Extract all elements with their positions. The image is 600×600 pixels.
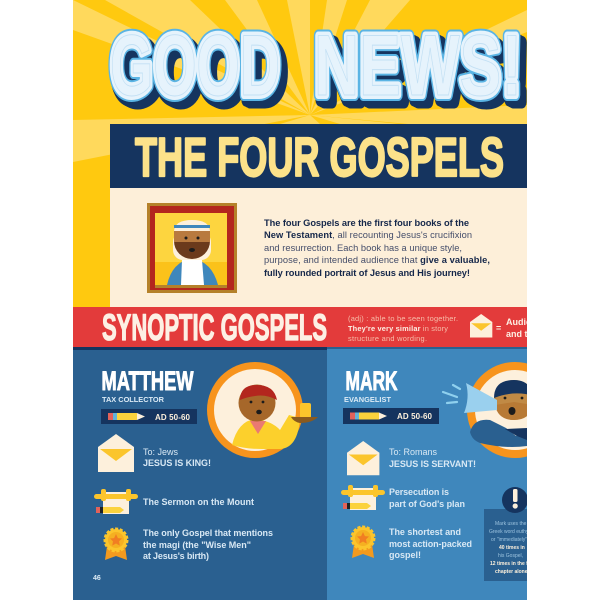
callout: Mark's word: chapter alone!	[495, 569, 530, 575]
title: GOOD NEWS!: NEWS!	[320, 25, 528, 121]
definition: They're very similar in story	[348, 324, 448, 333]
title: GOOD NEWS!: GOOD	[110, 18, 280, 114]
title: GOOD NEWS!: NEWS!	[318, 24, 526, 120]
callout: Mark's word: Greek word euthys	[489, 529, 531, 535]
definition: structure and wording.	[348, 334, 427, 343]
teaching text	[389, 487, 465, 509]
fact text: The only Gospel that mentions	[143, 528, 273, 538]
callout: Mark's word	[484, 487, 536, 581]
red band: Synoptic Gospels: SYNOPTIC GOSPELS	[102, 307, 327, 348]
title: GOOD NEWS!: GOOD	[112, 23, 282, 119]
fact text	[389, 527, 472, 560]
callout: Mark's word: 12 times in the first	[490, 561, 536, 567]
fact text: at Jesus's birth)	[143, 551, 209, 561]
audience text: JESUS IS KING!	[143, 458, 211, 468]
audience text	[389, 447, 476, 469]
definition	[348, 314, 458, 343]
page number: 46	[93, 575, 101, 582]
icon: scroll	[341, 485, 385, 510]
teaching text: The Sermon on the Mount	[143, 497, 254, 507]
date bar: AD 50-60	[155, 413, 191, 422]
icon: envelope legend	[470, 314, 492, 338]
intro text: The four Gospels are the first four books of the	[264, 218, 469, 228]
audience text: To: Jews	[143, 447, 179, 457]
icon: medal	[352, 527, 374, 558]
intro panel	[110, 188, 527, 308]
date bar: AD 50-60	[397, 412, 433, 421]
icon: envelope	[347, 441, 379, 475]
intro text: New Testament, all recounting Jesus's crucifixion	[264, 230, 472, 240]
definition: (adj) : able to be seen together.	[348, 314, 458, 323]
role: TAX COLLECTOR	[102, 395, 165, 404]
callout: Mark's word: Mark uses the	[495, 521, 527, 527]
legend text: Audience	[506, 317, 547, 327]
audience text: JESUS IS SERVANT!	[389, 459, 476, 469]
title: GOOD NEWS!: GOOD	[114, 24, 284, 120]
intro text	[264, 218, 490, 278]
portrait of Jesus in a frame	[147, 203, 237, 293]
audience text: To: Romans	[389, 447, 438, 457]
legend text: and theme	[506, 329, 551, 339]
audience text	[143, 447, 211, 468]
icon: medal	[105, 529, 127, 560]
icon: scroll	[94, 489, 138, 514]
name: MARK	[346, 366, 398, 396]
panel: Mark	[327, 347, 563, 600]
fact text	[143, 528, 273, 561]
title: GOOD NEWS!: GOOD	[116, 25, 286, 121]
title: GOOD NEWS!	[110, 18, 528, 121]
intro text: fully rounded portrait of Jesus and His journey!	[264, 268, 470, 278]
date bar	[343, 408, 439, 424]
icon: envelope	[98, 434, 134, 472]
legend text: =	[496, 323, 501, 333]
role: EVANGELIST	[344, 395, 391, 404]
date bar	[101, 409, 197, 424]
fact text: The shortest and	[389, 527, 461, 537]
teaching text: part of God's plan	[389, 499, 465, 509]
icon: megaphone	[464, 383, 497, 413]
page background: sunburst	[73, 0, 527, 310]
title: GOOD NEWS!: GOOD	[110, 18, 280, 114]
portrait: Matthew	[207, 362, 318, 458]
title: GOOD NEWS!: NEWS!	[316, 23, 524, 119]
fact text: gospel!	[389, 550, 421, 560]
callout: Mark's word: or "immediately"	[491, 537, 527, 543]
name: MATTHEW	[102, 366, 194, 396]
title: GOOD NEWS!: NEWS!	[314, 18, 522, 114]
title: GOOD NEWS!: GOOD	[110, 18, 280, 114]
intro text: and resurrection. Each book has a unique style,	[264, 243, 462, 253]
fact text: the magi (the "Wise Men"	[143, 540, 251, 550]
teaching text: Persecution is	[389, 487, 449, 497]
intro text: purpose, and intended audience that give a valuable,	[264, 255, 490, 265]
fact text: most action-packed	[389, 539, 472, 549]
portrait: Mark	[443, 362, 563, 458]
right page margin	[527, 0, 600, 600]
title: GOOD NEWS!: NEWS!	[314, 18, 522, 114]
callout: Mark's word: 40 times in	[499, 545, 525, 551]
callout: Mark's word: his Gospel,	[498, 553, 523, 559]
panel: Matthew	[73, 347, 327, 600]
title: GOOD NEWS!: NEWS!	[314, 18, 522, 114]
